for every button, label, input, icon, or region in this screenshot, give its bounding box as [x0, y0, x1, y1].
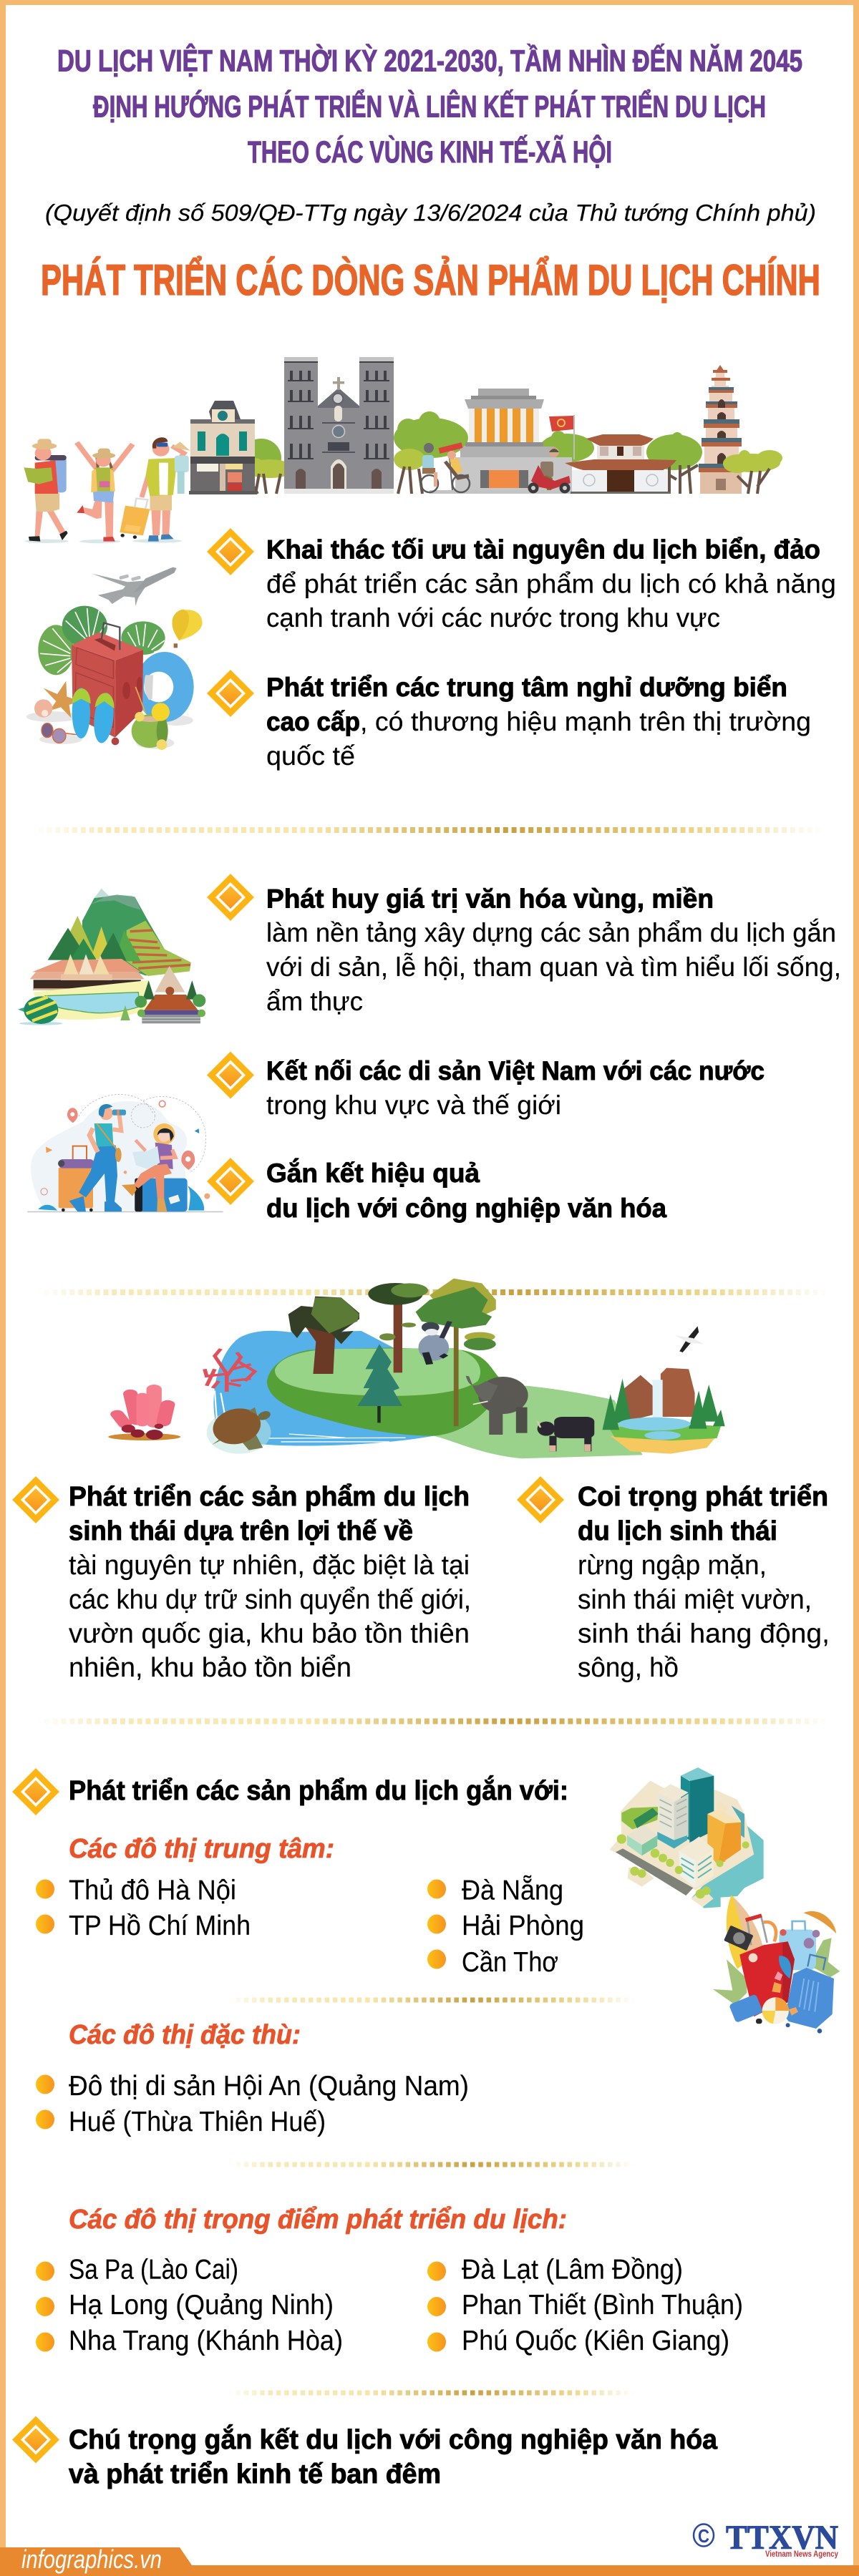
- orange luggage: [58, 1146, 94, 1211]
- illustration: tourists: [24, 437, 190, 543]
- striped ball: [18, 996, 62, 1025]
- section: central cities: Các đô thị trung tâm:: [69, 1834, 334, 1864]
- bullet: ecotourism products: tài nguyên tự nhiên, đặc biệt là tại: [69, 1551, 470, 1581]
- divider: [30, 827, 825, 833]
- light blue suitcase: [779, 1921, 820, 1970]
- section: key tourism cities: Sa Pa (Lào Cai): [69, 2254, 238, 2285]
- section: central cities: Thủ đô Hà Nội: [69, 1875, 236, 1906]
- logo: TTXVN: Vietnam News Agency: [765, 2549, 838, 2559]
- buffalo: [538, 1417, 594, 1451]
- pine: [357, 1344, 402, 1423]
- section: central cities: Hải Phòng: [462, 1911, 584, 1941]
- surfboard: [727, 1895, 764, 1969]
- title: [57, 43, 802, 170]
- bullet: luxury resort centres: [207, 670, 811, 771]
- section: distinctive cities: Huế (Thừa Thiên Huế): [69, 2107, 326, 2137]
- bullet: luxury resort centres: , có thương hiệu mạnh trên thị trường: [360, 707, 811, 736]
- bullet: connecting heritage: trong khu vực và thế giới: [266, 1091, 561, 1120]
- section: distinctive cities: Các đô thị đặc thù:: [69, 2020, 301, 2050]
- forest: [48, 916, 141, 961]
- person jumping: [77, 442, 132, 542]
- hat: [804, 1911, 836, 1933]
- mountain: [81, 889, 191, 975]
- light land: [275, 1348, 480, 1396]
- bullet: regional culture: [207, 874, 841, 1016]
- bullet: night economy: Chú trọng gắn kết du lịch với công nghiệp văn hóa: [69, 2424, 718, 2455]
- bullet: regional culture: làm nền tảng xây dựng các sản phẩm du lịch gắn: [266, 918, 836, 947]
- bullet: regional culture: Phát huy giá trị văn hóa vùng, miền: [266, 884, 714, 913]
- bullet: ecotourism priorities: sinh thái hang động,: [578, 1619, 830, 1649]
- elephant: [466, 1376, 528, 1435]
- mausoleum: [430, 389, 576, 494]
- front tree: [723, 450, 782, 494]
- tall tree: [368, 1283, 428, 1372]
- bullet: ecotourism products: nhiên, khu bảo tồn biển: [69, 1653, 351, 1683]
- section: key tourism cities: Các đô thị trọng điểm phát triển du lịch:: [69, 2205, 567, 2235]
- pins and marks: [41, 1101, 210, 1199]
- orange tower: [707, 1802, 744, 1865]
- yellow luggage: [120, 499, 150, 539]
- street trees: [617, 1834, 749, 1898]
- small bag: [729, 1994, 763, 2023]
- illustration: Hanoi skyline: [189, 357, 782, 494]
- bullet: luxury resort centres: Phát triển các trung tâm nghỉ dưỡng biển: [266, 673, 787, 702]
- red coral: [205, 1349, 255, 1392]
- section: central cities: [36, 1834, 584, 1978]
- cream building: [679, 1837, 714, 1888]
- waterfall island: [602, 1368, 725, 1454]
- illustration: travellers: [27, 1094, 223, 1212]
- subtitle: decision reference: (Quyết định số 509/QĐ-TTg ngày 13/6/2024 của Thủ tướng Chính phủ): [45, 200, 816, 226]
- bullet: ecotourism priorities: [517, 1476, 830, 1683]
- section: distinctive cities: Đô thị di sản Hội An (Quảng Nam): [69, 2071, 469, 2102]
- bullet: cultural industry link: [207, 1158, 666, 1223]
- shell: [34, 699, 52, 718]
- bullet: ecotourism priorities: rừng ngập mặn,: [578, 1551, 767, 1581]
- bullet: ecotourism priorities: sinh thái miệt vườn,: [578, 1585, 812, 1615]
- flip flops: [72, 688, 116, 744]
- vendor: [173, 441, 190, 494]
- coconut: [132, 687, 170, 750]
- title: THEO CÁC VÙNG KINH TẾ-XÃ HỘI: [248, 135, 612, 170]
- footer strip: infographics.vn: [21, 2545, 162, 2574]
- bullet: ecotourism priorities: sông, hồ: [578, 1653, 679, 1683]
- footer strip: [0, 2545, 859, 2576]
- bullet: sea and islands: Khai thác tối ưu tài nguyên du lịch biển, đảo: [266, 535, 820, 564]
- red suitcase: [72, 623, 143, 745]
- bullet: regional culture: ẩm thực: [266, 987, 363, 1016]
- teal tower: [681, 1767, 714, 1843]
- red suitcase: [739, 1941, 795, 2024]
- bullet: connecting heritage: Kết nối các di sản Việt Nam với các nước: [266, 1056, 765, 1085]
- bullet: ecotourism products: vườn quốc gia, khu bảo tồn thiên: [69, 1619, 470, 1649]
- bullet: luxury resort centres: cao cấp: [266, 707, 360, 736]
- section: key tourism cities: [36, 2205, 743, 2356]
- woman with map: [122, 1123, 188, 1211]
- bullet: connecting heritage: [207, 1052, 765, 1120]
- man with binoculars: [69, 1104, 126, 1211]
- opera house: [189, 401, 257, 494]
- logo: TTXVN: C: [698, 2525, 709, 2547]
- sunglasses: [42, 723, 81, 743]
- monkey: [418, 1322, 450, 1365]
- section: distinctive cities: [36, 2020, 469, 2137]
- divider: [228, 2164, 636, 2165]
- white tower: [657, 1784, 689, 1848]
- balloon: [173, 610, 203, 648]
- bullet: sea and islands: [207, 528, 836, 633]
- rice terraces: [127, 921, 191, 976]
- logo: TTXVN: TTXVN: [726, 2519, 838, 2557]
- section: key tourism cities: Hạ Long (Quảng Ninh): [69, 2290, 334, 2321]
- person with map: [24, 439, 68, 542]
- lake: [34, 980, 148, 1020]
- bullet: sea and islands: cạnh tranh với các nước trong khu vực: [266, 603, 720, 633]
- beach ball: [762, 1997, 789, 2024]
- section: central cities: TP Hồ Chí Minh: [69, 1911, 251, 1941]
- bullet: ecotourism products: [12, 1476, 471, 1683]
- backdrop: [31, 1101, 187, 1211]
- bullet: ecotourism products: Phát triển các sản phẩm du lịch: [69, 1482, 470, 1512]
- inflatable ring: [135, 652, 194, 722]
- flag: [549, 415, 575, 459]
- bullet: ecotourism products: sinh thái dựa trên lợi thế về: [69, 1516, 413, 1546]
- shadows: [26, 711, 193, 749]
- plane: [92, 567, 177, 606]
- bullet: cultural industry link: Gắn kết hiệu quả: [266, 1158, 480, 1188]
- illustration: ecosystem: [108, 1279, 725, 1458]
- divider: [228, 1999, 636, 2001]
- bullet: ecotourism priorities: Coi trọng phát triển: [578, 1482, 828, 1512]
- section: key tourism cities: Phan Thiết (Bình Thuận): [462, 2290, 743, 2321]
- illustration: mountain village: [18, 889, 205, 1025]
- palms: [713, 1938, 840, 2005]
- small temple: [120, 966, 205, 1023]
- divider: [228, 2392, 636, 2394]
- temple: [565, 434, 676, 494]
- bullet: sea and islands: để phát triển các sản phẩm du lịch có khả năng: [266, 570, 836, 598]
- stork: [675, 1326, 704, 1352]
- starfish: [44, 681, 80, 718]
- illustration: luggage pile: [713, 1895, 840, 2034]
- section: central cities: Cần Thơ: [462, 1947, 558, 1978]
- heading: products tied to: Phát triển các sản phẩm du lịch gắn với:: [69, 1775, 568, 1806]
- section: key tourism cities: Nha Trang (Khánh Hòa): [69, 2326, 343, 2356]
- palm leaves: [38, 606, 165, 675]
- pink coral: [108, 1385, 180, 1440]
- plants: [38, 1186, 204, 1211]
- cathedral: [284, 357, 394, 494]
- bullet: night economy: [12, 2416, 718, 2489]
- pagoda: [699, 365, 743, 494]
- blue suitcase: [785, 1955, 834, 2034]
- bullet: cultural industry link: du lịch với công nghiệp văn hóa: [266, 1194, 666, 1223]
- broad tree: [288, 1297, 359, 1374]
- ring and handle: [746, 1916, 776, 1945]
- camera: [724, 1926, 754, 1951]
- section: central cities: Đà Nẵng: [462, 1875, 563, 1906]
- bullet: ecotourism priorities: du lịch sinh thái: [578, 1516, 777, 1546]
- water: [213, 1331, 434, 1446]
- turtle: [206, 1405, 273, 1454]
- bullet: night economy: và phát triển kinh tế ban đêm: [69, 2459, 441, 2489]
- divider: [36, 1719, 830, 1724]
- bullet: ecotourism products: các khu dự trữ sinh quyển thế giới,: [69, 1585, 471, 1615]
- longhouse: [30, 954, 145, 990]
- section: key tourism cities: Đà Lạt (Lâm Đồng): [462, 2254, 683, 2285]
- divider behind trees: [36, 1289, 830, 1295]
- bullet: luxury resort centres: quốc tế: [266, 741, 355, 771]
- illustration: beach travel: [26, 567, 203, 750]
- motorbike: [528, 447, 571, 494]
- person with sunglasses: [142, 437, 184, 542]
- bullet: regional culture: với di sản, lễ hội, tham quan và tìm hiểu lối sống,: [266, 952, 841, 982]
- trees behind: [241, 411, 702, 494]
- slender tree: [416, 1279, 496, 1426]
- illustration: isometric city: [610, 1767, 764, 1908]
- cyclo: [421, 442, 470, 492]
- low building: [627, 1825, 657, 1855]
- dark land: [267, 1347, 510, 1436]
- heading: products tied to: [12, 1768, 568, 1815]
- section: key tourism cities: Phú Quốc (Kiên Giang): [462, 2326, 729, 2356]
